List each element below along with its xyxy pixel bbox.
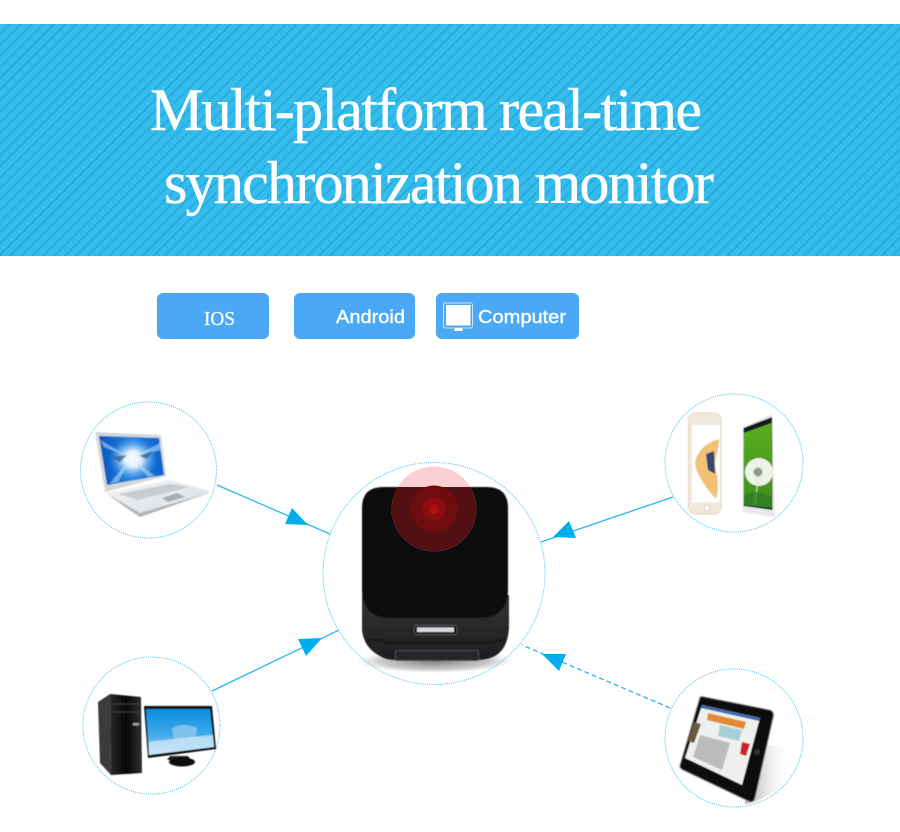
red indicator glow <box>392 466 476 552</box>
icon: green phone <box>743 414 775 517</box>
icon: monitor <box>444 303 472 331</box>
USB port <box>414 626 457 634</box>
device face <box>362 487 508 618</box>
bottom slot <box>396 650 478 660</box>
platform button: Android: Android <box>336 306 405 327</box>
icon: gold phone <box>688 413 721 514</box>
central device circle <box>323 462 545 684</box>
phones circle <box>665 394 803 532</box>
platform button: Android <box>294 293 415 339</box>
icon: tablet <box>680 696 791 804</box>
desktop circle <box>83 657 220 794</box>
arrow: phones to device <box>541 497 673 542</box>
shadow <box>357 649 513 673</box>
title banner <box>0 24 900 256</box>
icon: laptop <box>95 432 209 517</box>
icon: tower <box>98 694 142 775</box>
arrow: tablet to device (dashed) <box>522 645 670 708</box>
laptop circle <box>80 402 216 538</box>
platform button: Computer <box>436 293 579 339</box>
tablet circle <box>665 669 803 807</box>
platform button: IOS <box>157 293 269 339</box>
device body <box>362 487 509 660</box>
arrow: laptop to device <box>217 485 330 534</box>
title: Multi-platform real-time <box>150 77 702 143</box>
platform button: Computer: Computer <box>478 306 566 327</box>
title <box>150 77 714 216</box>
platform button: IOS: IOS <box>204 308 235 330</box>
title: synchronization monitor <box>164 150 714 216</box>
arrow: desktop to device <box>212 630 339 691</box>
icon: monitor <box>144 706 216 766</box>
